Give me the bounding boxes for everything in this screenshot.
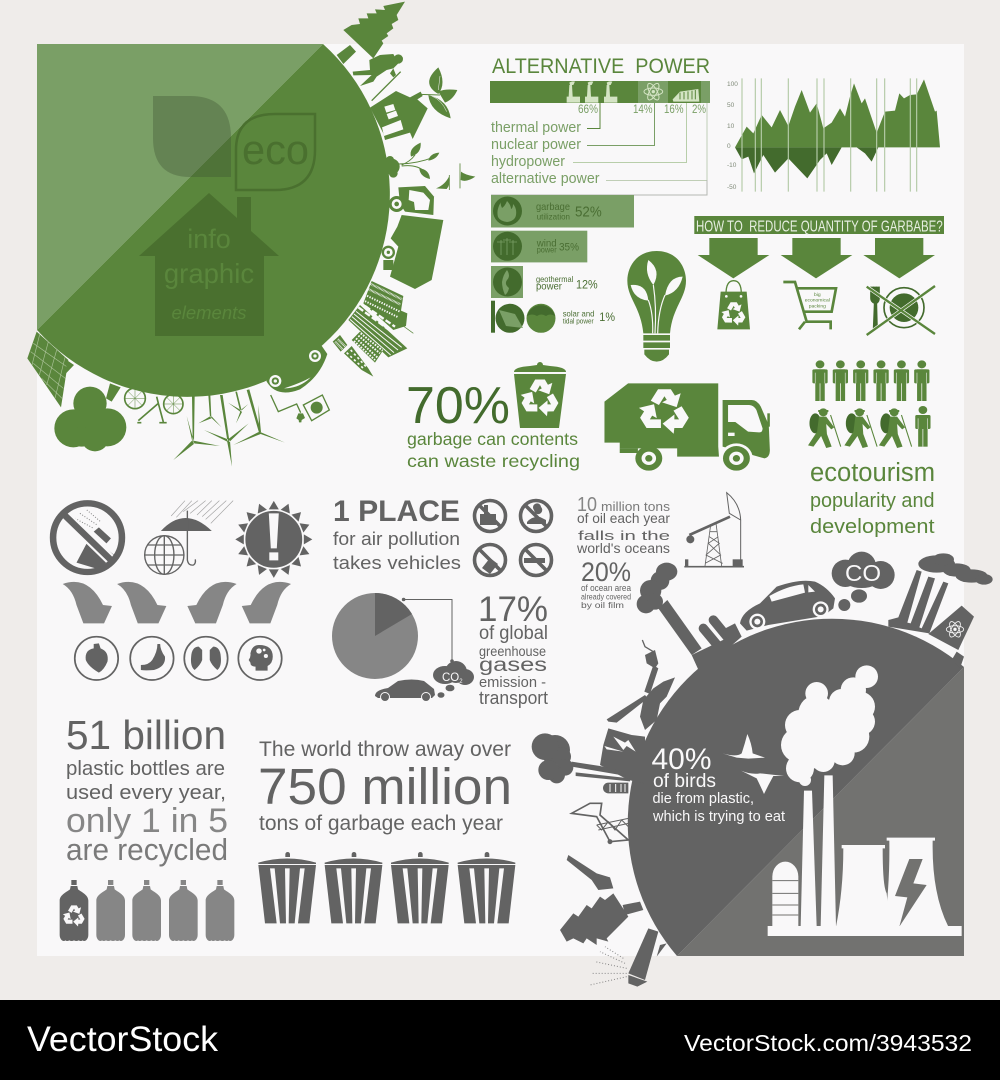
pylon (572, 803, 628, 844)
flying birds (436, 163, 475, 190)
percent labels: 2% (692, 104, 706, 116)
house logo: info (187, 224, 231, 254)
drum (603, 783, 628, 793)
CO2 cloud with car: 2 (459, 679, 463, 685)
cooling towers (836, 845, 890, 927)
text: 750 million: tons of garbage each year (259, 812, 503, 835)
chart axis labels: -50 (727, 184, 737, 191)
ecotourism people (808, 360, 931, 448)
text: 40 percent of birds: die from plastic, (652, 791, 754, 807)
bar: garbage utilization: utilization (537, 211, 570, 221)
content panel (37, 44, 964, 956)
text: 17 percent: of global (479, 623, 548, 644)
icon: heart (86, 643, 108, 673)
excavator and crane (607, 640, 658, 723)
text: oil: already covered (581, 592, 631, 602)
text: 1 place (333, 495, 461, 573)
footer url: VectorStock.com/3943532 (684, 1030, 972, 1056)
grey icons row (53, 501, 312, 680)
text: 51 billion: used every year, (66, 782, 226, 804)
factory stacks with smoke (888, 553, 993, 633)
planet lower triangle (677, 667, 964, 956)
power block (600, 728, 645, 783)
text: 40 percent of birds (652, 743, 785, 825)
eco house (370, 91, 428, 140)
bar: solar and tidal power (491, 301, 615, 333)
pie chart 17 percent (332, 593, 418, 679)
icon: shopping cart: big (814, 292, 821, 298)
electric car (267, 343, 327, 392)
text: 750 million: 750 million (258, 758, 512, 815)
bar: geothermal power: geothermal (536, 274, 573, 284)
round tree (54, 383, 126, 451)
power type labels: alternative power (491, 171, 600, 187)
text: 51 billion: are recycled (66, 833, 228, 867)
pine (560, 893, 643, 945)
text: 17 percent: transport (479, 688, 548, 708)
bar: solar and tidal power: 1% (599, 312, 615, 324)
organ icons (75, 637, 282, 680)
text: 17 percent (478, 590, 548, 708)
curved arrows (63, 582, 291, 623)
text: 51 billion (66, 712, 228, 867)
text: 40 percent of birds: 40% (652, 743, 712, 776)
icon: stomach (141, 644, 165, 670)
bar: geothermal power: power (536, 281, 563, 292)
car (740, 581, 835, 631)
text: oil: falls in the (578, 528, 670, 543)
house logo: elements (171, 302, 247, 323)
icon: umbrella over globe (145, 501, 233, 574)
garbage truck (382, 186, 443, 289)
CO label: CO (845, 560, 881, 586)
power type labels: thermal power (491, 120, 581, 136)
CO cloud (832, 552, 895, 611)
bar: wind power: 35% (559, 242, 579, 254)
factory icons (567, 81, 699, 103)
area chart (735, 78, 940, 192)
ecotourism text (810, 459, 935, 538)
scrub tree (640, 677, 675, 730)
text: 40 percent of birds: which is trying to eat (652, 809, 785, 825)
left stacks and smoke (637, 563, 742, 673)
icon: shopping cart (783, 282, 836, 329)
chart axis labels: 0 (727, 143, 731, 150)
icon: recycling bag (717, 281, 750, 329)
text: 750 million (258, 738, 512, 835)
text: oil: of ocean area (581, 583, 631, 593)
chart axis labels: 50 (727, 102, 735, 109)
area chart positive (735, 79, 940, 147)
planet silhouettes (27, 2, 475, 467)
power plant (722, 665, 962, 936)
eco leaf: eco (242, 126, 309, 173)
leaf logo (153, 96, 231, 177)
bar: solar and tidal power: tidal power (563, 318, 594, 325)
left smoke stacks (532, 733, 630, 783)
down arrows (698, 238, 935, 278)
percent labels: 14% (633, 104, 652, 116)
recycling truck (604, 383, 770, 473)
spray can (590, 928, 667, 987)
ecotourism text: ecotourism (810, 459, 935, 487)
green eco planet (27, 2, 475, 467)
power type labels: hydropower (491, 154, 565, 170)
stat: 70 percent (406, 377, 580, 471)
text: 17 percent: greenhouse (479, 643, 546, 659)
text: 51 billion: only 1 in 5 (66, 802, 228, 840)
planet disc (37, 44, 390, 397)
city buildings (333, 281, 413, 377)
planet disc (628, 619, 964, 956)
planet silhouettes (532, 552, 993, 987)
CO2 cloud with car: CO (442, 672, 459, 684)
silo (772, 862, 798, 927)
bar: wind power: wind (536, 239, 557, 250)
text: 17 percent: gases (479, 655, 547, 676)
bar: garbage utilization (491, 195, 634, 228)
text: oil (576, 494, 671, 610)
nuclear block (928, 606, 974, 668)
pie connector (402, 598, 454, 663)
text: 1 place: 1 PLACE (333, 495, 460, 528)
planet light triangle (37, 44, 323, 330)
bar: wind power: power (537, 246, 557, 255)
icon: no spray (53, 503, 122, 572)
CO2 cloud with car (375, 661, 474, 702)
chimneys (801, 791, 817, 927)
percent labels (578, 104, 706, 116)
text: 51 billion: 51 billion (66, 712, 226, 758)
footer logo: VectorStock (27, 1020, 219, 1059)
stat: 70 percent: 70% (406, 377, 510, 435)
solar panel (27, 332, 74, 407)
bar: geothermal power (491, 266, 598, 298)
text: 40 percent of birds: of birds (653, 771, 716, 792)
bar: solar and tidal power: solar and (563, 309, 595, 319)
ecotourism text: popularity and (810, 490, 934, 512)
lightning (895, 859, 927, 927)
power type labels (491, 120, 600, 187)
bicycle (125, 388, 183, 423)
stat: 70 percent: garbage can contents (407, 429, 578, 449)
text: oil: world's oceans (576, 541, 670, 556)
power share bar (490, 81, 710, 103)
icon: shopping cart: packing (809, 304, 826, 310)
windmills (173, 389, 285, 467)
icon: warning sun (235, 501, 312, 578)
heading: alternative power: ALTERNATIVE POWER (492, 55, 710, 78)
runner (567, 855, 613, 890)
icon: recycling can (514, 362, 566, 428)
bar: wind power (491, 231, 587, 262)
icon: oil pump (684, 493, 744, 567)
icon: crossed plate (867, 286, 935, 335)
icon: shopping cart: economical (805, 298, 830, 304)
grey polluted planet (532, 552, 993, 987)
icon: head with gears (249, 645, 273, 671)
text: 1 place: for air pollution (333, 528, 460, 549)
footer watermark bar (0, 1000, 1000, 1080)
leaf sprig (420, 67, 457, 118)
percent labels: 16% (664, 104, 684, 116)
text: 51 billion: plastic bottles are (66, 758, 225, 780)
ecotourism text: development (810, 516, 935, 538)
power type labels: nuclear power (491, 137, 581, 153)
house logo (139, 193, 279, 336)
connector lines (491, 103, 707, 195)
text: oil: by oil film (581, 600, 624, 610)
area chart negative (735, 147, 878, 178)
chart axis labels (727, 81, 738, 191)
climber (353, 54, 403, 101)
chart gridlines (742, 78, 917, 192)
text: oil: 20% (581, 557, 631, 587)
house logo: graphic (164, 258, 254, 289)
text: 750 million: The world throw away over (259, 738, 511, 761)
smoke cloud (781, 665, 878, 786)
percent labels: 66% (578, 104, 598, 116)
pine tree (337, 2, 405, 64)
text: oil: million tons (601, 499, 671, 514)
stat: 70 percent: can waste recycling (407, 451, 580, 471)
icon: lungs (191, 647, 221, 670)
eco leaf (236, 114, 315, 190)
chart axis labels: -10 (727, 162, 737, 169)
bar: garbage utilization: 52% (575, 204, 602, 221)
seedling bush (384, 143, 439, 179)
text: oil: 10 (577, 494, 597, 516)
bar: garbage utilization: garbage (536, 201, 570, 213)
plug and socket (271, 395, 329, 422)
bar: geothermal power: 12% (576, 279, 598, 291)
text: oil: of oil each year (577, 511, 671, 526)
chart axis labels: 10 (727, 123, 735, 130)
text: 17 percent: emission - (479, 674, 546, 691)
trash bins (258, 852, 515, 923)
prohibition icons (474, 500, 552, 576)
text: 17 percent: 17% (478, 590, 548, 629)
base (768, 926, 962, 936)
white birds (722, 734, 784, 794)
chart axis labels: 100 (727, 81, 738, 88)
eco light bulb (627, 251, 686, 362)
bottles (60, 880, 234, 941)
text: 1 place: takes vehicles (333, 552, 461, 573)
